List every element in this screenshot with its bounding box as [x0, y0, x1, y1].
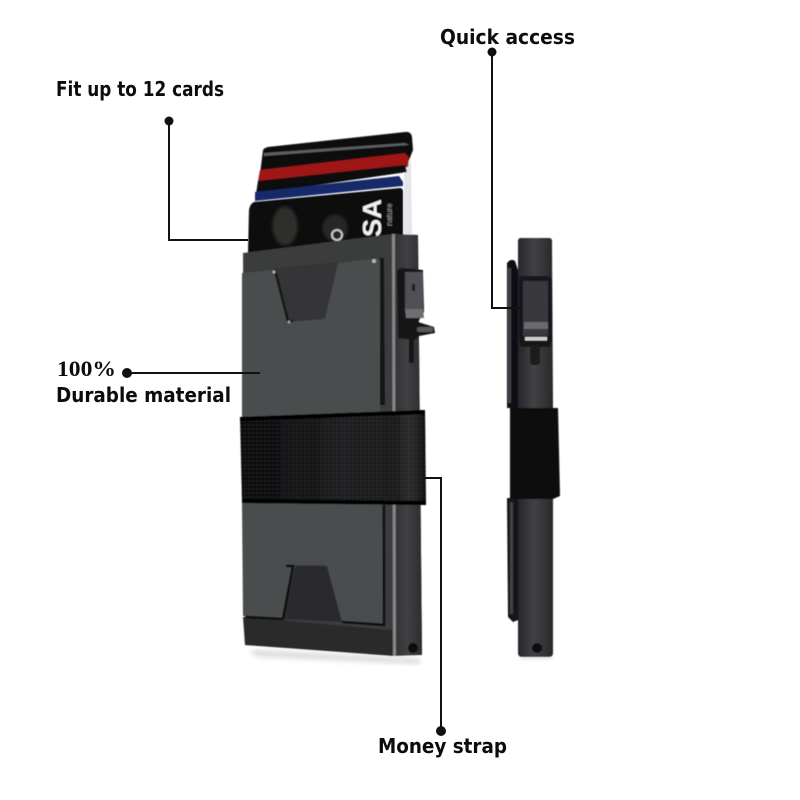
connector: quick access — [488, 48, 520, 308]
label: 100 percent durable material: 100% — [57, 356, 116, 381]
side body lower — [507, 498, 553, 657]
connector: money strap — [425, 478, 446, 736]
label: quick access: Quick access — [440, 25, 575, 49]
label: money strap: Money strap — [378, 734, 507, 758]
card hologram texture — [272, 206, 298, 246]
label: 100 percent durable material — [56, 356, 231, 407]
lower plate — [242, 500, 384, 625]
side strap — [510, 408, 560, 499]
side clip upper — [507, 260, 518, 408]
quick access slider button — [397, 268, 435, 363]
connector: fit up to 12 cards — [164, 116, 248, 240]
elastic money strap — [240, 410, 426, 505]
wallet case body — [243, 234, 422, 656]
upper plate — [242, 258, 385, 420]
main wallet front view — [240, 132, 435, 664]
side slider — [519, 276, 552, 345]
side shadow — [520, 656, 552, 660]
card signature lettering: nature — [385, 203, 394, 226]
wallet shadow — [250, 650, 420, 664]
connector: durable material — [122, 368, 260, 378]
side hole — [532, 643, 542, 653]
card stack — [248, 132, 413, 253]
side clip lower — [507, 498, 518, 622]
card VISA lettering: SA — [357, 199, 387, 237]
label: fit up to 12 cards: Fit up to 12 cards — [56, 77, 224, 101]
side body upper — [507, 238, 553, 408]
side view wallet — [507, 238, 560, 660]
screw — [408, 643, 418, 653]
label: 100 percent durable material: Durable material — [56, 383, 231, 407]
